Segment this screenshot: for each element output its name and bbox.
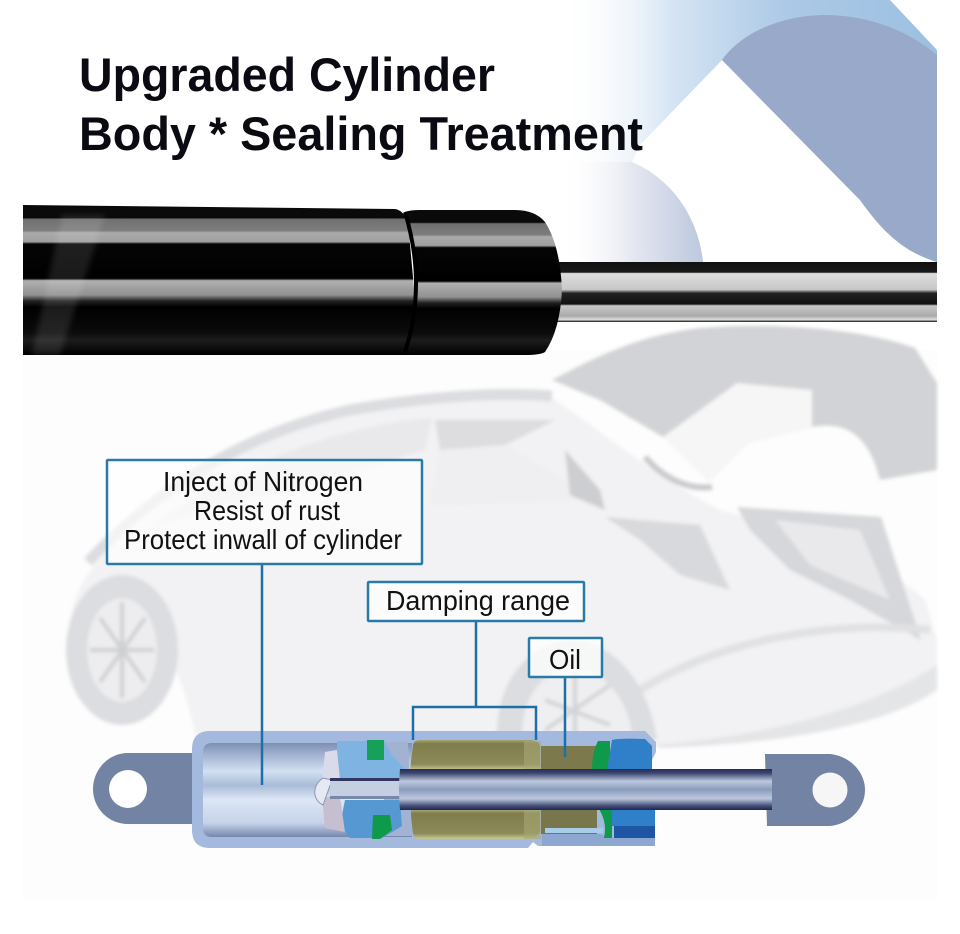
outer cylinder wall xyxy=(192,731,656,848)
tailgate window opening xyxy=(663,383,812,482)
gas strut on the car xyxy=(645,457,712,488)
black end collar xyxy=(405,210,562,355)
background panel xyxy=(23,350,937,900)
rear wheel xyxy=(497,640,657,740)
reflection streak xyxy=(32,215,105,355)
blue end seal xyxy=(607,739,655,838)
open tailgate xyxy=(552,326,937,482)
left mounting eye xyxy=(93,753,195,824)
gas spring cutaway diagram xyxy=(93,731,865,848)
callout: oil xyxy=(529,638,602,757)
front wheel xyxy=(66,575,178,725)
door mirror xyxy=(565,450,605,510)
callout: nitrogen: Protect inwall of cylinder xyxy=(124,524,402,555)
faded car illustration xyxy=(66,326,937,748)
title: Upgraded Cylinder xyxy=(79,48,495,101)
oil damping section xyxy=(410,740,597,839)
callout: damping range: Damping range xyxy=(386,585,570,616)
right mounting eye xyxy=(765,754,865,826)
callout: nitrogen: Inject of Nitrogen xyxy=(163,466,363,497)
callout: damping range xyxy=(368,582,584,740)
title: Body * Sealing Treatment xyxy=(79,107,643,160)
car body xyxy=(68,390,937,745)
roof band xyxy=(88,395,552,562)
callout: nitrogen xyxy=(107,460,422,785)
nitrogen chamber xyxy=(203,743,412,837)
black cylinder body xyxy=(23,205,420,355)
piston xyxy=(315,740,412,839)
piston rod xyxy=(399,769,772,810)
side window xyxy=(435,420,555,450)
green seals xyxy=(592,741,612,838)
windshield xyxy=(150,418,432,528)
hatch opening xyxy=(737,507,921,640)
callout: nitrogen: Resist of rust xyxy=(194,495,340,526)
lower bleed bar xyxy=(545,828,603,833)
decorative blue shapes xyxy=(560,0,937,262)
gas spring photo xyxy=(23,205,937,355)
lower side crease xyxy=(640,628,930,690)
title xyxy=(79,48,643,160)
tail light xyxy=(605,517,730,590)
chrome rod xyxy=(555,262,937,322)
callout: oil: Oil xyxy=(549,644,581,675)
